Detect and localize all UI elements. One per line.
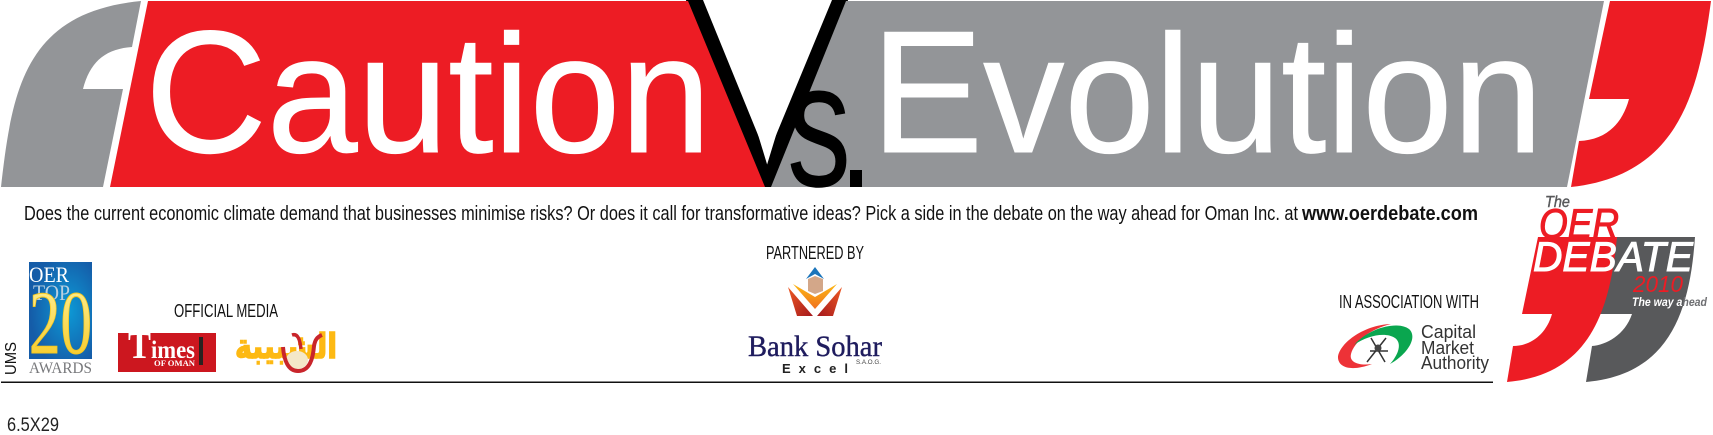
OER: OER [1539,200,1619,247]
opening quote mark, grey [1,1,141,187]
Excel tagline: Excel [782,361,848,376]
CMA wordmark [1421,322,1489,373]
logo: Times of Oman: Times [128,325,195,367]
partnered by label: PARTNERED BY [766,243,864,263]
logo: OER Top 20 Awards [29,262,92,377]
CMA wordmark: Capital [1421,322,1476,342]
panel: Caution, red [110,1,765,187]
UMS label: UMS [3,342,20,375]
logo: OER Top 20 Awards: OER [29,262,69,287]
CMA wordmark: Market [1421,338,1474,358]
tagline [24,203,1478,225]
red quote mark [1507,237,1617,382]
2010: 2010 [1632,271,1683,297]
The: The [1545,194,1570,211]
DEBATE: DEBATE [1533,233,1694,280]
panel: Evolution, grey [771,1,1604,187]
official media label: OFFICIAL MEDIA [174,301,278,321]
logo: The OER Debate 2010 [1507,194,1708,382]
full stop of Vs [850,170,862,187]
grey quote mark [1586,237,1695,382]
closing quote mark, red [1571,1,1711,187]
V counter, white [703,0,832,157]
tagline question: Does the current economic climate demand that businesses minimise risks? Or does it call for transformative ideas? Pick a side in the debate on the way ahead for Oman Inc. at [24,203,1298,225]
The way ahead: The way ahead [1632,295,1708,309]
logo: Times of Oman: OF OMAN [154,359,195,368]
Bank Sohar wordmark: Bank Sohar [748,330,882,363]
logo: Bank Sohar [748,267,882,376]
icon: CMA swooshes and emblem [1338,324,1412,368]
white area under the banner [680,188,780,208]
logo: Capital Market Authority [1338,322,1489,373]
association label: IN ASSOCIATION WITH [1339,291,1479,312]
logo: OER Top 20 Awards: AWARDS [29,360,92,377]
CMA wordmark: Authority [1421,353,1489,373]
icon: Bank Sohar emblem [788,267,842,316]
logo: Al Shabiba: الشبيبة [235,328,337,366]
letter s of Vs: s [787,25,851,224]
logo: OER Top 20 Awards: TOP [33,280,70,305]
logo: OER Top 20 Awards: 20 [29,274,92,373]
logo: Times of Oman [118,325,216,372]
tagline URL: www.oerdebate.com [1301,203,1478,225]
S.A.O.G. label: S.A.O.G. [856,360,881,366]
banner: Caution versus Evolution [1,0,1711,246]
footer rule [1,382,1493,383]
